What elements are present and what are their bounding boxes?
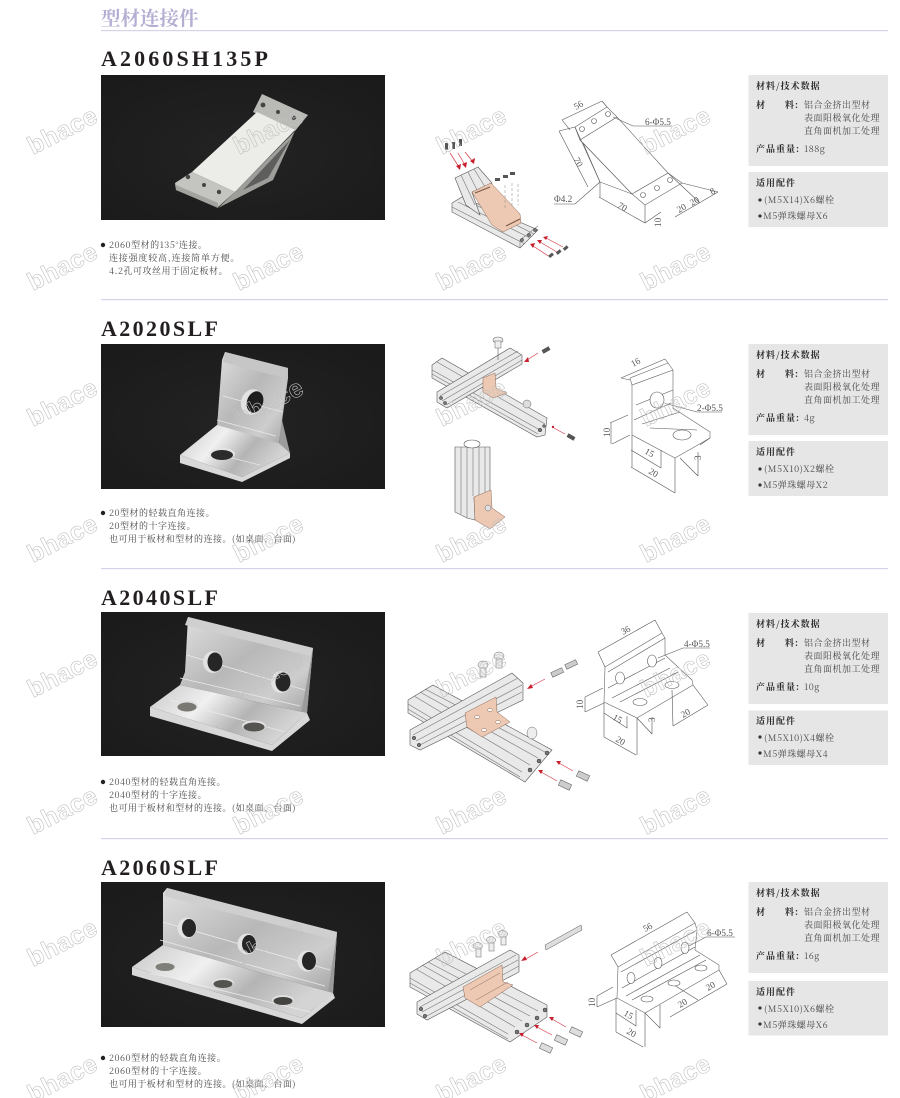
watermarks: bhace	[23, 913, 102, 972]
specification panel: 表面阳极氧化处理	[804, 918, 880, 931]
watermarks: bhace	[432, 644, 511, 703]
accessories panel	[748, 710, 888, 765]
product photo	[101, 612, 385, 756]
watermarks: bhace	[23, 509, 102, 568]
dimension drawing: 4-Φ5.5	[684, 639, 710, 649]
specification panel: 表面阳极氧化处理	[804, 111, 880, 124]
dimension drawing: 36	[619, 623, 632, 637]
page title: 型材连接件	[101, 8, 199, 30]
specification panel: 料:	[785, 636, 799, 649]
dimension drawing: 10	[602, 427, 612, 437]
description: 连接强度较高,连接简单方便。	[109, 251, 240, 264]
specification panel: 铝合金挤出型材	[804, 636, 871, 649]
dimension drawing: 15	[611, 712, 624, 726]
assembly diagram	[445, 139, 569, 258]
assembly diagram	[410, 925, 583, 1053]
description: 也可用于板材和型材的连接。(如桌面、台面)	[109, 801, 296, 814]
watermarks: bhace	[636, 373, 715, 432]
section: A2040SLF	[101, 585, 888, 814]
dimension drawing: 20	[676, 996, 689, 1010]
product photo	[101, 344, 385, 489]
watermarks: bhace	[23, 373, 102, 432]
accessories panel: M5弹珠螺母X4	[763, 747, 828, 760]
watermarks: bhace	[229, 781, 308, 840]
dimension drawing: 20	[625, 1026, 638, 1040]
specification panel: 表面阳极氧化处理	[804, 649, 880, 662]
watermarks: bhace	[229, 373, 308, 432]
specification panel: 直角面机加工处理	[804, 124, 880, 137]
specification panel: 材料/技术数据	[756, 886, 821, 899]
specification panel: 188g	[804, 142, 825, 155]
dimension drawing: 6-Φ5.5	[645, 117, 671, 127]
product photo	[101, 882, 385, 1027]
specification panel: 材	[756, 98, 766, 111]
specification panel: 产品重量:	[756, 949, 800, 962]
specification panel: 产品重量:	[756, 142, 800, 155]
accessories panel	[748, 441, 888, 496]
watermarks: bhace	[432, 101, 511, 160]
dimension drawing	[575, 620, 710, 755]
dimension drawing: 56	[572, 98, 585, 112]
dimension drawing: 20	[675, 201, 688, 215]
dimension drawing: Φ4.2	[554, 194, 573, 204]
dimension drawing: 3	[647, 717, 657, 722]
specification panel: 10g	[804, 680, 820, 693]
watermarks: bhace	[229, 644, 308, 703]
dimension drawing	[602, 355, 723, 493]
specification panel: 表面阳极氧化处理	[804, 380, 880, 393]
accessories panel	[748, 172, 888, 227]
description	[101, 238, 240, 277]
dimension drawing: 3	[693, 455, 703, 460]
accessories panel: (M5X10)X2螺栓	[764, 462, 835, 475]
specification panel: 直角面机加工处理	[804, 931, 880, 944]
accessories panel: (M5X14)X6螺栓	[764, 193, 835, 206]
watermarks	[23, 101, 715, 1098]
description: 20型材的十字连接。	[109, 519, 196, 532]
section: A2060SLF	[101, 855, 888, 1090]
description: 2040型材的十字连接。	[109, 788, 207, 801]
accessories panel: 适用配件	[756, 985, 796, 998]
description	[101, 775, 296, 814]
dimension drawing: 8	[708, 186, 717, 197]
accessories panel: 适用配件	[756, 176, 796, 189]
watermarks: bhace	[636, 913, 715, 972]
dimension drawing: 70	[572, 156, 585, 169]
watermarks: bhace	[23, 644, 102, 703]
accessories panel: M5弹珠螺母X6	[763, 1018, 828, 1031]
accessories panel: (M5X10)X4螺栓	[764, 731, 835, 744]
dimension drawing	[554, 98, 718, 227]
dimension drawing: 15	[643, 446, 656, 460]
dimension drawing: 20	[688, 194, 701, 208]
description: 2060型材的轻载直角连接。	[109, 1051, 226, 1064]
watermarks: bhace	[432, 509, 511, 568]
product photo	[101, 75, 385, 220]
product code heading: A2020SLF	[101, 316, 218, 341]
watermarks: bhace	[636, 237, 715, 296]
specification panel: 铝合金挤出型材	[804, 98, 871, 111]
specification panel: 16g	[804, 949, 820, 962]
description	[101, 506, 296, 545]
description: 2060型材的135°连接。	[109, 238, 207, 251]
specification panel	[748, 882, 888, 973]
dimension drawing: 20	[704, 979, 717, 993]
specification panel: 产品重量:	[756, 680, 800, 693]
product code heading: A2060SH135P	[101, 46, 268, 71]
watermarks: bhace	[432, 913, 511, 972]
watermarks: bhace	[432, 237, 511, 296]
specification panel: 料:	[785, 367, 799, 380]
product code heading: A2060SLF	[101, 855, 218, 880]
assembly diagram	[432, 337, 575, 529]
specification panel: 材料/技术数据	[756, 348, 821, 361]
dimension drawing: 10	[653, 217, 663, 227]
specification panel: 铝合金挤出型材	[804, 367, 871, 380]
product code heading: A2040SLF	[101, 585, 218, 610]
description: 4.2孔可攻丝用于固定板材。	[109, 264, 228, 277]
dimension drawing: 10	[587, 997, 597, 1007]
specification panel: 料:	[785, 98, 799, 111]
dimension drawing: 16	[629, 355, 642, 369]
watermarks: bhace	[229, 101, 308, 160]
specification panel: 材	[756, 905, 766, 918]
dimension drawing	[587, 912, 735, 1047]
section: A2060SH135P	[101, 46, 888, 277]
watermarks: bhace	[636, 101, 715, 160]
section: A2020SLF	[101, 316, 888, 545]
specification panel	[748, 344, 888, 435]
accessories panel	[748, 981, 888, 1036]
description	[101, 1051, 296, 1090]
specification panel: 直角面机加工处理	[804, 662, 880, 675]
dimension drawing: 6-Φ5.5	[707, 928, 733, 938]
watermarks: bhace	[432, 781, 511, 840]
dimension drawing: 20	[647, 466, 660, 480]
description: 也可用于板材和型材的连接。(如桌面、台面)	[109, 532, 296, 545]
description: 2040型材的轻载直角连接。	[109, 775, 226, 788]
dimension drawing: 56	[641, 920, 654, 934]
dimension drawing: 15	[622, 1008, 635, 1022]
specification panel: 料:	[785, 905, 799, 918]
accessories panel: 适用配件	[756, 445, 796, 458]
specification panel	[748, 613, 888, 704]
assembly diagram	[408, 652, 590, 790]
watermarks: bhace	[23, 781, 102, 840]
dimension drawing: 20	[679, 706, 692, 720]
watermarks: bhace	[229, 913, 308, 972]
specification panel: 材料/技术数据	[756, 79, 821, 92]
accessories panel: 适用配件	[756, 714, 796, 727]
watermarks: bhace	[23, 101, 102, 160]
specification panel: 材	[756, 636, 766, 649]
watermarks: bhace	[229, 237, 308, 296]
dimension drawing: 70	[616, 200, 629, 214]
accessories panel: M5弹珠螺母X6	[763, 209, 828, 222]
watermarks: bhace	[636, 644, 715, 703]
specification panel	[748, 75, 888, 166]
specification panel: 材	[756, 367, 766, 380]
dimension drawing: 10	[575, 699, 585, 709]
specification panel: 产品重量:	[756, 411, 800, 424]
accessories panel: M5弹珠螺母X2	[763, 478, 828, 491]
watermarks: bhace	[23, 237, 102, 296]
watermarks: bhace	[229, 509, 308, 568]
description: 20型材的轻载直角连接。	[109, 506, 215, 519]
specification panel: 铝合金挤出型材	[804, 905, 871, 918]
accessories panel: (M5X10)X6螺栓	[764, 1002, 835, 1015]
watermarks: bhace	[636, 781, 715, 840]
description: 2060型材的十字连接。	[109, 1064, 207, 1077]
specification panel: 材料/技术数据	[756, 617, 821, 630]
dimension drawing: 2-Φ5.5	[697, 403, 723, 413]
watermarks: bhace	[432, 373, 511, 432]
specification panel: 4g	[804, 411, 815, 424]
specification panel: 直角面机加工处理	[804, 393, 880, 406]
description: 也可用于板材和型材的连接。(如桌面、台面)	[109, 1077, 296, 1090]
dimension drawing: 20	[614, 734, 627, 748]
watermarks: bhace	[636, 509, 715, 568]
